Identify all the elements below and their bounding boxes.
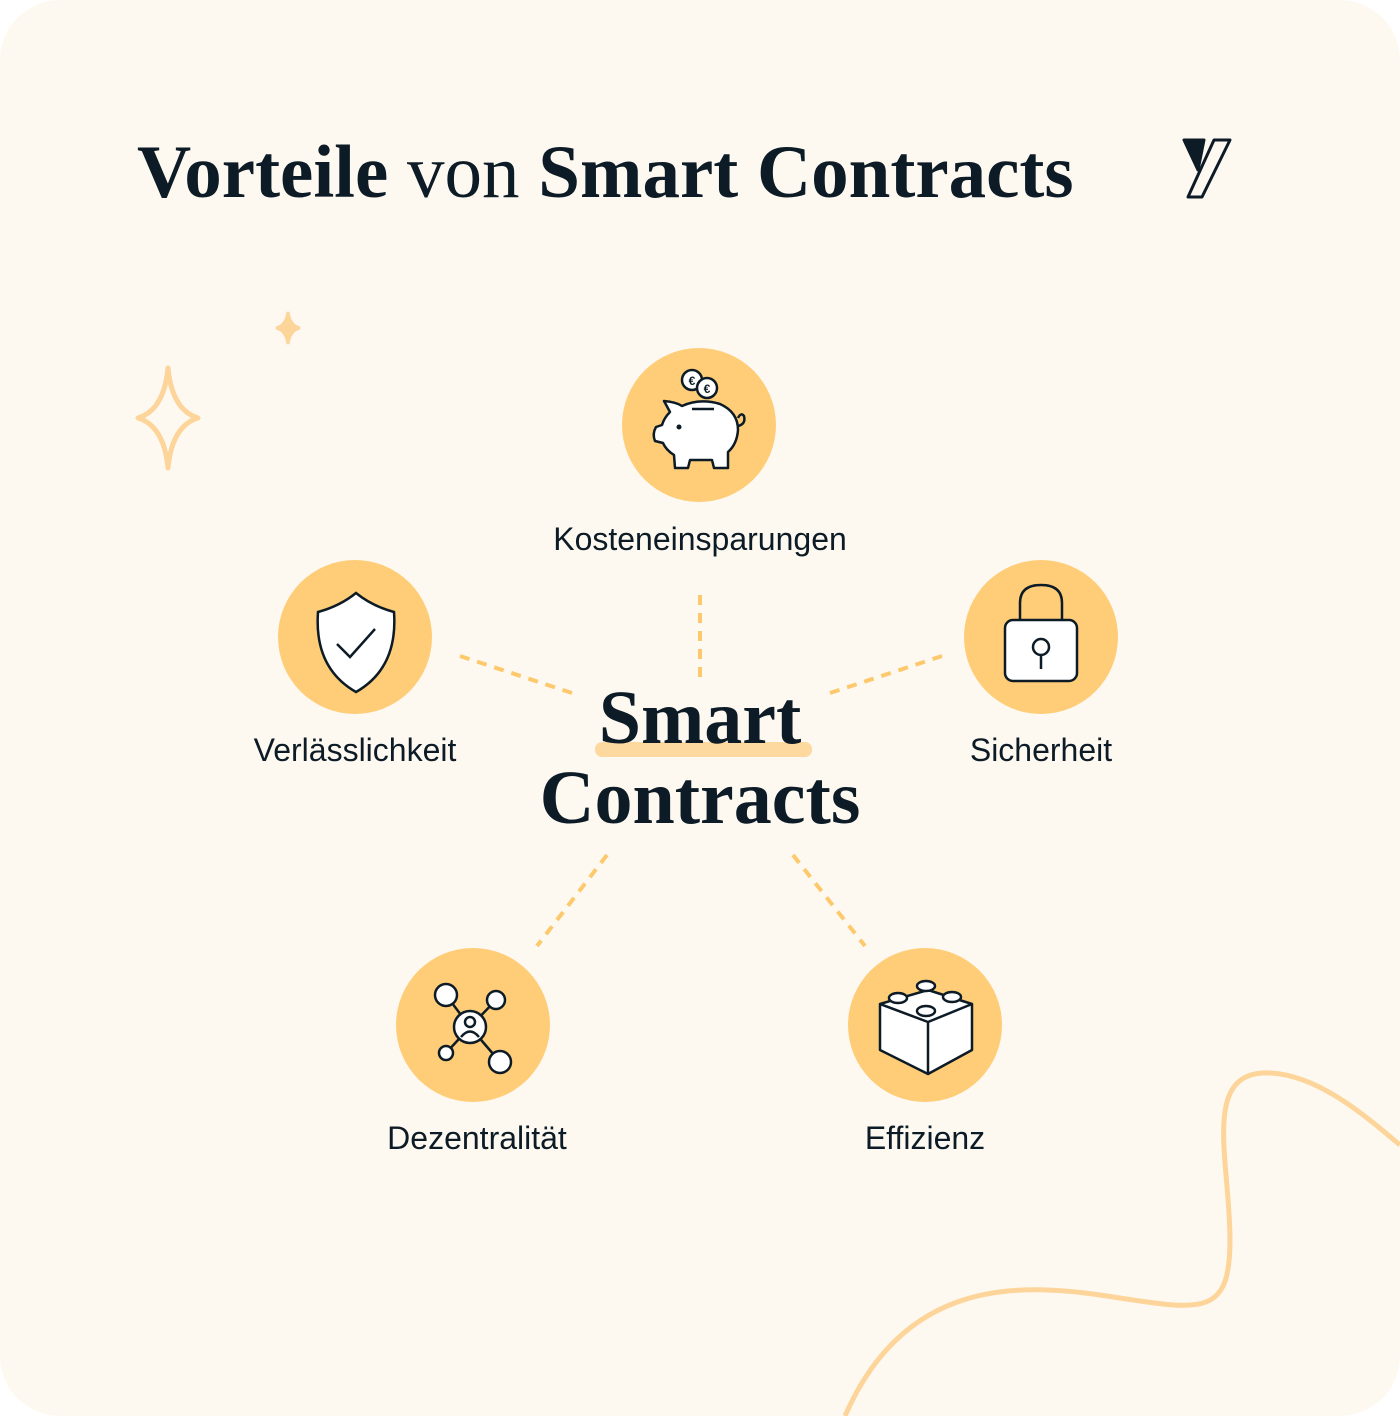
title: Vorteile von Smart Contracts bbox=[137, 131, 1074, 214]
icon: lock bbox=[964, 560, 1118, 714]
highlight under Smart bbox=[595, 742, 812, 757]
sparkle big bbox=[138, 368, 198, 468]
logo bbox=[1184, 140, 1230, 197]
label: Effizienz: Effizienz bbox=[865, 1120, 985, 1156]
sparkle small bbox=[276, 312, 300, 344]
icon: piggy bank: € bbox=[704, 382, 711, 396]
center text: Contracts bbox=[540, 756, 860, 840]
icon: lego brick bbox=[848, 948, 1002, 1102]
dashed connectors bbox=[460, 595, 942, 946]
icon: shield bbox=[278, 560, 432, 714]
icon: piggy bank: € bbox=[689, 374, 696, 388]
label: Kosteneinsparungen: Kosteneinsparungen bbox=[553, 521, 847, 557]
center text bbox=[540, 676, 860, 840]
center text: Smart bbox=[599, 676, 801, 760]
icon: piggy bank bbox=[622, 348, 776, 502]
label: Sicherheit: Sicherheit bbox=[970, 732, 1112, 768]
wave curve bbox=[845, 1073, 1400, 1416]
label: Dezentralität: Dezentralität bbox=[387, 1120, 567, 1156]
icon: network bbox=[396, 948, 550, 1102]
label: Verlässlichkeit: Verlässlichkeit bbox=[254, 732, 456, 768]
